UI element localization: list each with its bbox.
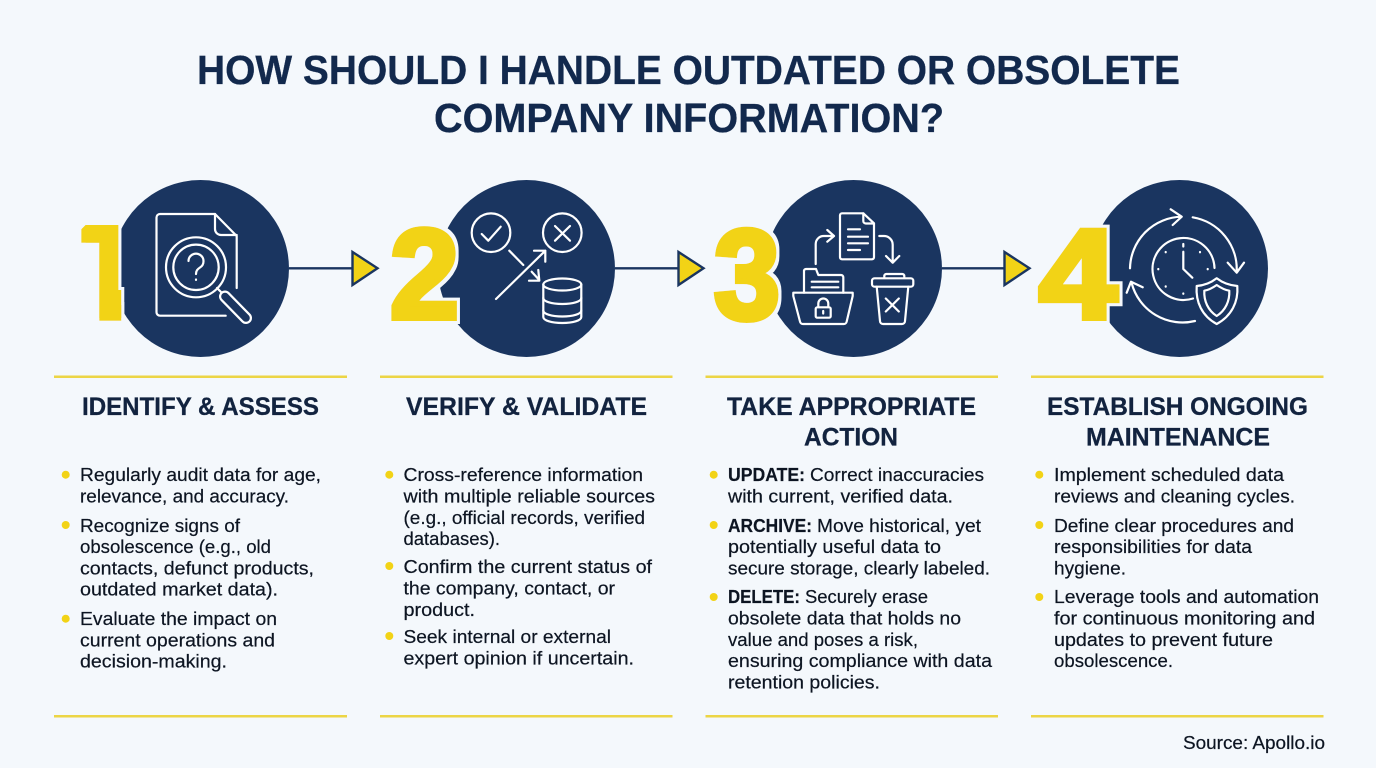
bullet list: outdated market data). <box>80 580 278 600</box>
digit 3: 3 <box>714 204 780 346</box>
bullet list: Implement scheduled data <box>1054 465 1285 485</box>
heading: IDENTIFY & ASSESS <box>82 393 319 421</box>
icon: clock with cycle arrows and shield <box>1127 209 1244 324</box>
bullet list <box>62 465 321 672</box>
bullet list: ARCHIVE: <box>728 516 812 536</box>
step 4 badge <box>1039 180 1268 357</box>
bullet list: Confirm the current status of <box>404 557 653 577</box>
bullet list: ensuring compliance with data <box>728 651 993 671</box>
arrow 3 to 4 <box>942 252 1030 285</box>
heading: TAKE APPROPRIATE <box>727 393 976 421</box>
panel: verify and validate <box>380 376 672 718</box>
bullet list: obsolescence. <box>1054 651 1173 671</box>
heading: ESTABLISH ONGOING <box>1047 393 1308 421</box>
bullet list: Seek internal or external <box>404 627 611 647</box>
bullet list: Evaluate the impact on <box>80 609 277 629</box>
bullet list: UPDATE: <box>728 465 805 485</box>
heading: VERIFY & VALIDATE <box>406 393 647 421</box>
step 2 badge <box>390 180 615 357</box>
bullet list: Define clear procedures and <box>1054 516 1294 536</box>
bullet list: Leverage tools and automation <box>1054 587 1319 607</box>
bullet list: Recognize signs of <box>80 516 241 536</box>
heading: MAINTENANCE <box>1086 424 1270 452</box>
bullet list: with multiple reliable sources <box>402 486 655 506</box>
panel: identify and assess <box>54 376 347 718</box>
bullet list: updates to prevent future <box>1054 630 1273 650</box>
bullet list: DELETE: <box>728 587 800 607</box>
digit 1: 1 <box>78 203 124 345</box>
step 3 badge <box>714 180 942 357</box>
bullet list: relevance, and accuracy. <box>80 486 289 506</box>
bullet list: Correct inaccuracies <box>810 465 984 485</box>
arrow 2 to 3 <box>615 252 704 285</box>
heading <box>727 393 976 452</box>
bullet list: hygiene. <box>1054 558 1126 578</box>
heading <box>1047 393 1308 452</box>
bullet list: expert opinion if uncertain. <box>404 648 634 668</box>
arrow 1 to 2 <box>289 252 378 285</box>
bullet list: Securely erase <box>805 587 928 607</box>
bullet list: with current, verified data. <box>727 486 953 506</box>
bullet list: retention policies. <box>728 672 880 692</box>
bullet list <box>710 465 993 692</box>
heading: ACTION <box>804 424 898 452</box>
bullet list <box>1035 465 1319 671</box>
bullet list <box>385 465 655 668</box>
panel: establish ongoing maintenance <box>1031 376 1324 718</box>
bullet list: value and poses a risk, <box>728 630 918 650</box>
title: COMPANY INFORMATION? <box>434 95 944 141</box>
bullet list: contacts, defunct products, <box>80 558 314 578</box>
bullet list: for continuous monitoring and <box>1054 608 1315 628</box>
title <box>197 47 1180 141</box>
icon: document with magnifier <box>156 214 246 318</box>
bullet list: (e.g., official records, verified <box>404 508 645 528</box>
bullet list: obsolescence (e.g., old <box>80 537 271 557</box>
bullet list: Cross-reference information <box>404 465 643 485</box>
bullet list: Move historical, yet <box>817 516 981 536</box>
digit 4: 4 <box>1039 203 1117 345</box>
bullet list: secure storage, clearly labeled. <box>728 558 990 578</box>
panel: take appropriate action <box>706 376 998 718</box>
title: HOW SHOULD I HANDLE OUTDATED OR OBSOLETE <box>197 47 1180 93</box>
source note: Source: Apollo.io <box>1183 733 1325 753</box>
bullet list: reviews and cleaning cycles. <box>1054 486 1295 506</box>
icon: check, cross, arrows and database <box>472 213 582 323</box>
bullet list: obsolete data that holds no <box>728 608 961 628</box>
bullet list: potentially useful data to <box>728 537 941 557</box>
step 1 badge <box>78 180 289 357</box>
digit 2: 2 <box>390 203 459 345</box>
bullet list: the company, contact, or <box>404 578 615 598</box>
bullet list: product. <box>404 600 475 620</box>
bullet list: responsibilities for data <box>1054 537 1253 557</box>
icon: document, archive folder and trash can <box>793 213 913 324</box>
bullet list: current operations and <box>80 630 275 650</box>
bullet list: Regularly audit data for age, <box>80 465 321 485</box>
bullet list: databases). <box>404 529 500 549</box>
bullet list: decision-making. <box>80 652 227 672</box>
